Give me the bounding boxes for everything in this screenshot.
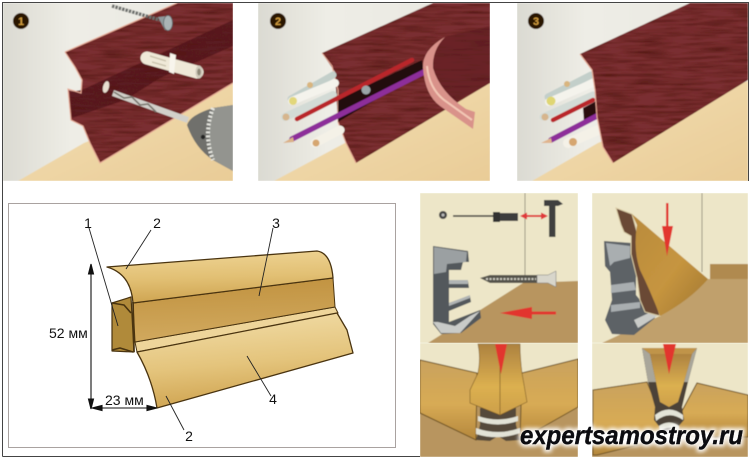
icon: screw [112,6,172,30]
step badge 1 [13,13,29,29]
step badge 2 [270,13,286,29]
left skirting [420,360,477,440]
icon: drill [113,92,233,171]
panel: profile diagram with dimensions [8,204,396,448]
cables [543,75,598,143]
step badge 3 [528,13,544,29]
cables [285,60,424,143]
floor [18,83,233,181]
icon: wall plug [147,53,202,78]
dimension labels: 23 мм [105,392,144,408]
panel: external corner piece [420,343,578,457]
profile clips [112,303,133,352]
step badge 3: 3 [533,16,539,28]
closed skirting board [580,3,748,163]
corner clip [476,408,520,441]
floor [428,281,578,343]
step badge 1: 1 [18,16,24,28]
clip-on cover being bent back [423,26,490,129]
double arrow [520,212,548,220]
left skirting [593,382,670,455]
floor [602,279,748,343]
part numbers: 2 [153,215,161,231]
icon: screwdriver [453,212,518,222]
panel 1: drilling the skirting board [3,3,233,181]
panel: mounting clip on wall [420,193,578,343]
corner cover [650,354,692,407]
red arrow left [500,307,556,319]
back channel [112,297,134,352]
part numbers [84,215,280,444]
skirting board with open channel [65,3,233,163]
part numbers: 4 [269,391,277,407]
leader lines [89,228,273,430]
clip [604,241,655,335]
red arrow down [662,203,673,256]
part numbers: 1 [84,215,92,231]
right skirting [668,383,748,437]
floor [592,435,748,457]
panel 2: laying cables [258,3,490,181]
dimension arrows [88,264,157,410]
panel: snapping front cover [592,193,748,343]
top curved band [107,251,333,303]
hole [102,80,110,94]
dimension labels [49,325,144,408]
floor [420,405,578,457]
panel: internal corner piece [592,343,748,457]
icon: hammer [544,200,563,237]
corner cut-out [642,348,697,434]
skirting profile drawing [107,251,353,408]
cover section [616,208,660,316]
lower curved panel [137,313,353,408]
red arrow [495,344,507,374]
lower lip [135,307,338,352]
part numbers: 2 [185,428,193,444]
middle band [133,278,335,342]
panel 3: cover closed [517,3,748,181]
channel [338,60,424,122]
step badge 2: 2 [275,16,281,28]
icon: long screw [480,271,556,287]
floor [274,83,490,181]
red arrow [663,344,676,374]
dimension labels: 52 мм [49,325,88,341]
right skirting [520,359,578,440]
part numbers: 3 [272,215,280,231]
corner cover [470,344,527,415]
icon: screw head [439,211,447,219]
skirting board [322,3,490,163]
lit profile edge [65,3,233,163]
clip section [433,246,481,334]
dark channel [70,20,233,118]
floor [532,81,748,181]
